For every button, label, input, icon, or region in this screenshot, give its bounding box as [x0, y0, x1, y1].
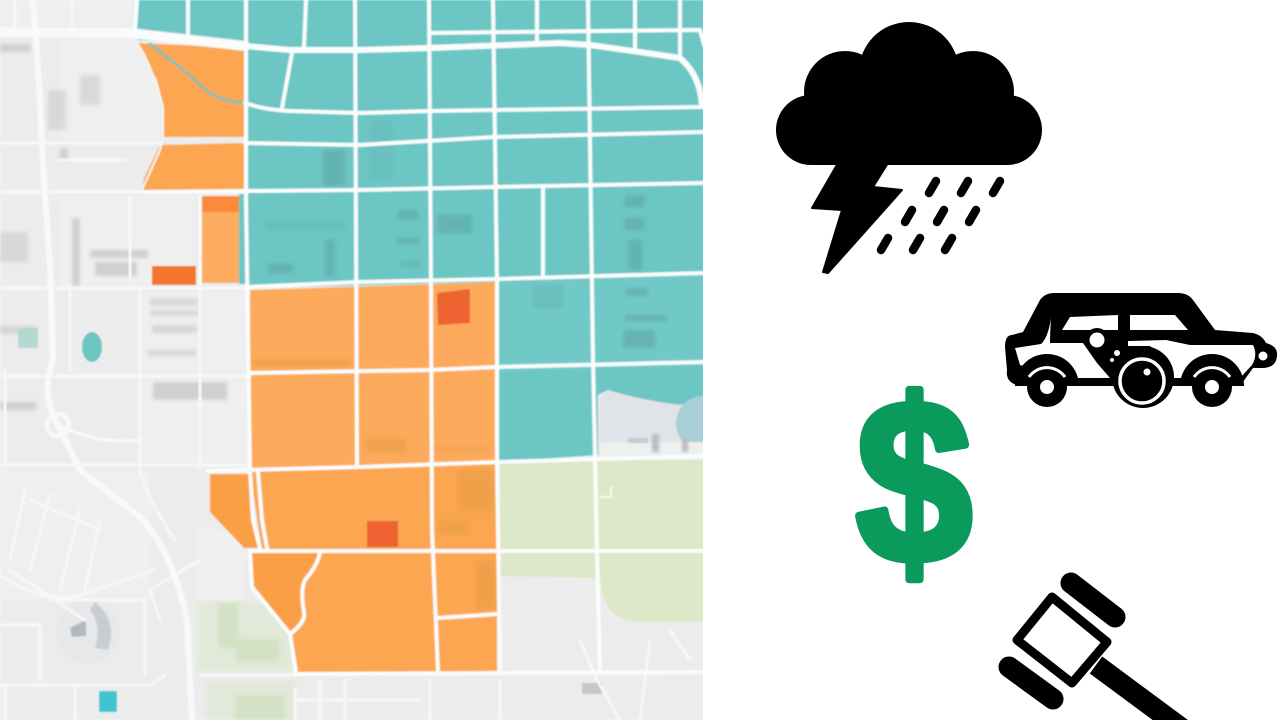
pale blocks on the west side	[0, 0, 248, 600]
car windows	[1062, 315, 1188, 330]
teal stream through orange parcel	[150, 44, 243, 103]
teal pond	[82, 332, 102, 362]
minor grey-area roads	[0, 0, 690, 720]
lightning bolt	[812, 163, 902, 273]
orange zone: north-west parcels	[137, 43, 244, 191]
gavel bottom cap	[1009, 667, 1053, 699]
orange parcel: south-west wedge	[210, 474, 260, 548]
car silhouette	[1005, 293, 1277, 386]
darker teal building footprints	[266, 150, 668, 348]
icon: green dollar sign: $	[856, 352, 972, 611]
map panel	[0, 0, 730, 720]
roads	[0, 0, 704, 720]
rear wheel	[1180, 354, 1244, 407]
park and grass areas	[500, 458, 704, 622]
icon: gavel	[1009, 583, 1200, 720]
gavel head	[1017, 597, 1107, 683]
darker orange building footprints	[252, 360, 496, 610]
rain drops	[881, 181, 1000, 250]
major white grid roads	[132, 0, 704, 674]
faint teal pool	[18, 328, 38, 348]
west side building footprints	[0, 44, 227, 410]
orange zone: lower block	[250, 462, 497, 674]
waterfront buildings and basin	[598, 391, 703, 460]
red-orange hot spot west	[152, 266, 196, 285]
cloud	[776, 22, 1042, 165]
gavel top cap	[1071, 583, 1115, 617]
greenery south-west	[197, 602, 295, 720]
map base land	[0, 0, 704, 720]
middle wheel	[1112, 346, 1174, 408]
gavel handle	[1096, 665, 1200, 720]
icon: damaged car	[1005, 293, 1277, 408]
orange parcel: southern triangle	[250, 552, 318, 633]
highway and roundabout	[0, 0, 245, 720]
tan building south	[582, 683, 602, 694]
teal zone	[135, 0, 704, 462]
red hot spots	[367, 289, 470, 547]
orange zone: central block	[250, 282, 497, 470]
darker green park patches	[218, 603, 285, 720]
small road stub in the park	[600, 487, 611, 497]
teal square marker	[99, 691, 117, 712]
impact damage	[1085, 328, 1122, 370]
dark orange hot spot north	[202, 196, 239, 212]
car body white panels	[1015, 318, 1255, 378]
lighter teal north-east of the zone	[498, 273, 704, 372]
icon: storm cloud with lightning and rain	[776, 22, 1042, 273]
teal strip beside parcel	[239, 194, 246, 284]
stadium	[69, 602, 112, 651]
front wheel	[1015, 354, 1079, 407]
tail light	[1258, 352, 1268, 360]
orange parcel with dark top	[201, 210, 240, 284]
